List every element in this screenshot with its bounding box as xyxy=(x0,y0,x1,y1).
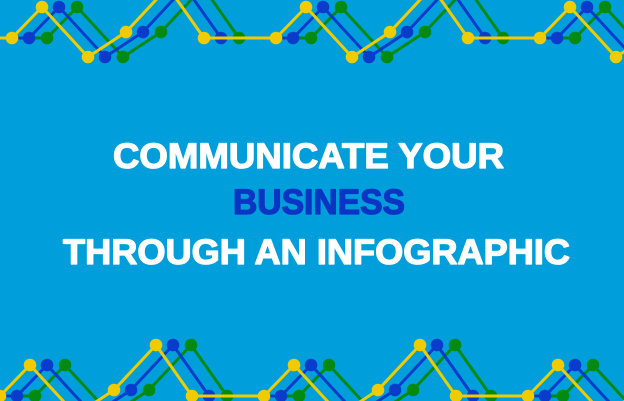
title xyxy=(63,137,570,272)
title: THROUGH AN INFOGRAPHIC xyxy=(63,233,570,272)
bottom zigzag line chart decoration xyxy=(0,339,624,401)
title: BUSINESS xyxy=(233,183,405,222)
title: COMMUNICATE YOUR xyxy=(113,137,504,176)
top zigzag line chart decoration xyxy=(0,0,624,63)
